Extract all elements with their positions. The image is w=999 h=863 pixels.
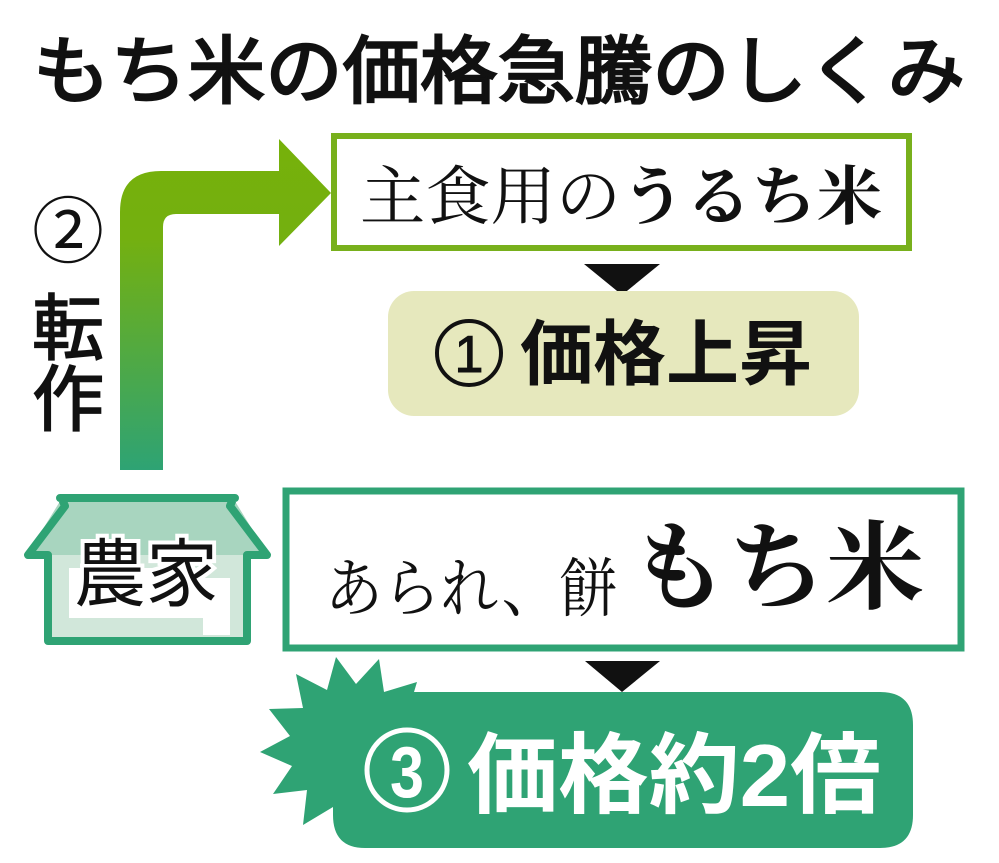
text: farmer: 農家 — [74, 533, 218, 616]
icon: circled 1 — [437, 321, 501, 385]
arrow: conversion to table rice — [120, 139, 331, 470]
arrowhead: down to price rise — [584, 264, 660, 295]
label: conversion: 作 — [32, 361, 104, 441]
arrowhead: down to doubled price — [585, 661, 660, 692]
panel: price rise — [388, 291, 859, 416]
icon: circled 3: 3 — [390, 733, 424, 813]
panel: glutinous rice — [286, 491, 961, 648]
icon: circled 1: 1 — [455, 326, 483, 384]
text: about double: 価格約2倍 — [467, 726, 881, 825]
icon: farmhouse — [27, 498, 268, 641]
title: もち米の価格急騰のしくみ — [33, 30, 965, 113]
text: price rise: 価格上昇 — [520, 316, 812, 395]
label: circled 2: ② — [32, 193, 104, 273]
label: conversion — [32, 290, 104, 441]
icon: circled 3 — [367, 730, 447, 813]
label: conversion: 転 — [32, 290, 104, 370]
text: rice crackers and mochi: あられ、餅 — [325, 554, 617, 625]
text: glutinous rice: もち米 — [630, 515, 924, 622]
panel: doubled price — [260, 657, 913, 848]
text: table rice: 主食用のうるち米 — [360, 162, 882, 233]
panel: table rice — [334, 136, 909, 248]
